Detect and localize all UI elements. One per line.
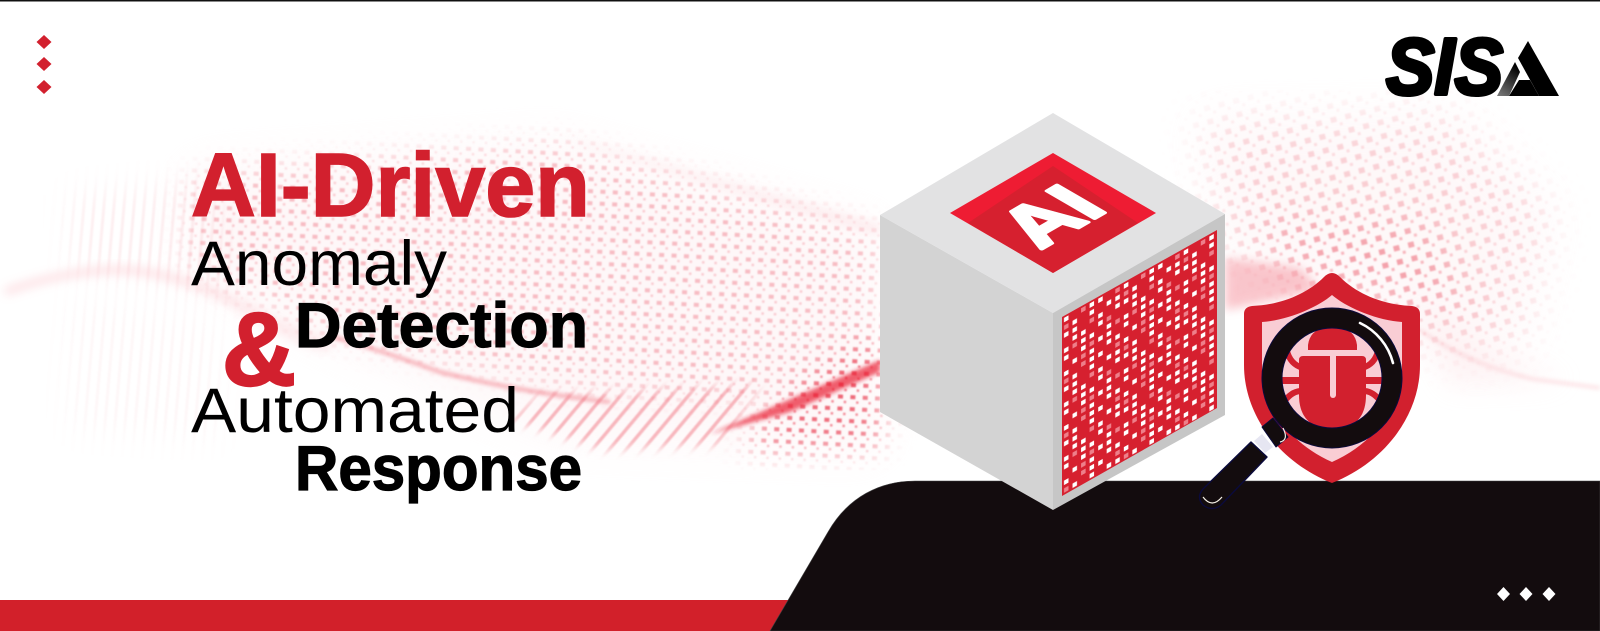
data panel on right face [1062, 230, 1217, 496]
cube right face [1053, 214, 1225, 510]
bug icon [1281, 328, 1384, 430]
magnifying glass [1200, 318, 1393, 508]
logo wordmark: SIS [1386, 22, 1503, 111]
handle highlights [1203, 428, 1285, 503]
title block [191, 136, 590, 504]
security shield with bug [1244, 273, 1420, 483]
heading: ampersand: & [222, 292, 296, 408]
cube top face [880, 113, 1225, 313]
handle [1200, 442, 1267, 508]
black base shape [770, 481, 1600, 631]
cube left face [880, 215, 1053, 510]
heading: Response: Response [295, 434, 582, 504]
white diamonds, bottom right [1497, 587, 1556, 601]
AI badge: AI [978, 174, 1124, 259]
heading: Automated: Automated [191, 376, 519, 446]
shield outer [1244, 273, 1420, 483]
red footer bar [0, 600, 800, 631]
AI badge [950, 153, 1156, 273]
lens ring [1272, 318, 1392, 438]
heading: AI-Driven: AI-Driven [191, 136, 590, 236]
isometric AI cube [880, 113, 1225, 510]
background: red halftone wave [0, 90, 1600, 470]
neck [1254, 434, 1273, 453]
collar [1262, 418, 1288, 447]
logo A mark [1497, 41, 1559, 96]
shield inner [1262, 295, 1402, 462]
top edge line [0, 0, 1600, 2]
heading: Detection: Detection [295, 291, 588, 361]
SISA logo [1386, 22, 1559, 111]
decorative red diamonds, top left [36, 35, 52, 94]
heading: Anomaly: Anomaly [191, 229, 448, 299]
lens highlight [1360, 323, 1393, 363]
